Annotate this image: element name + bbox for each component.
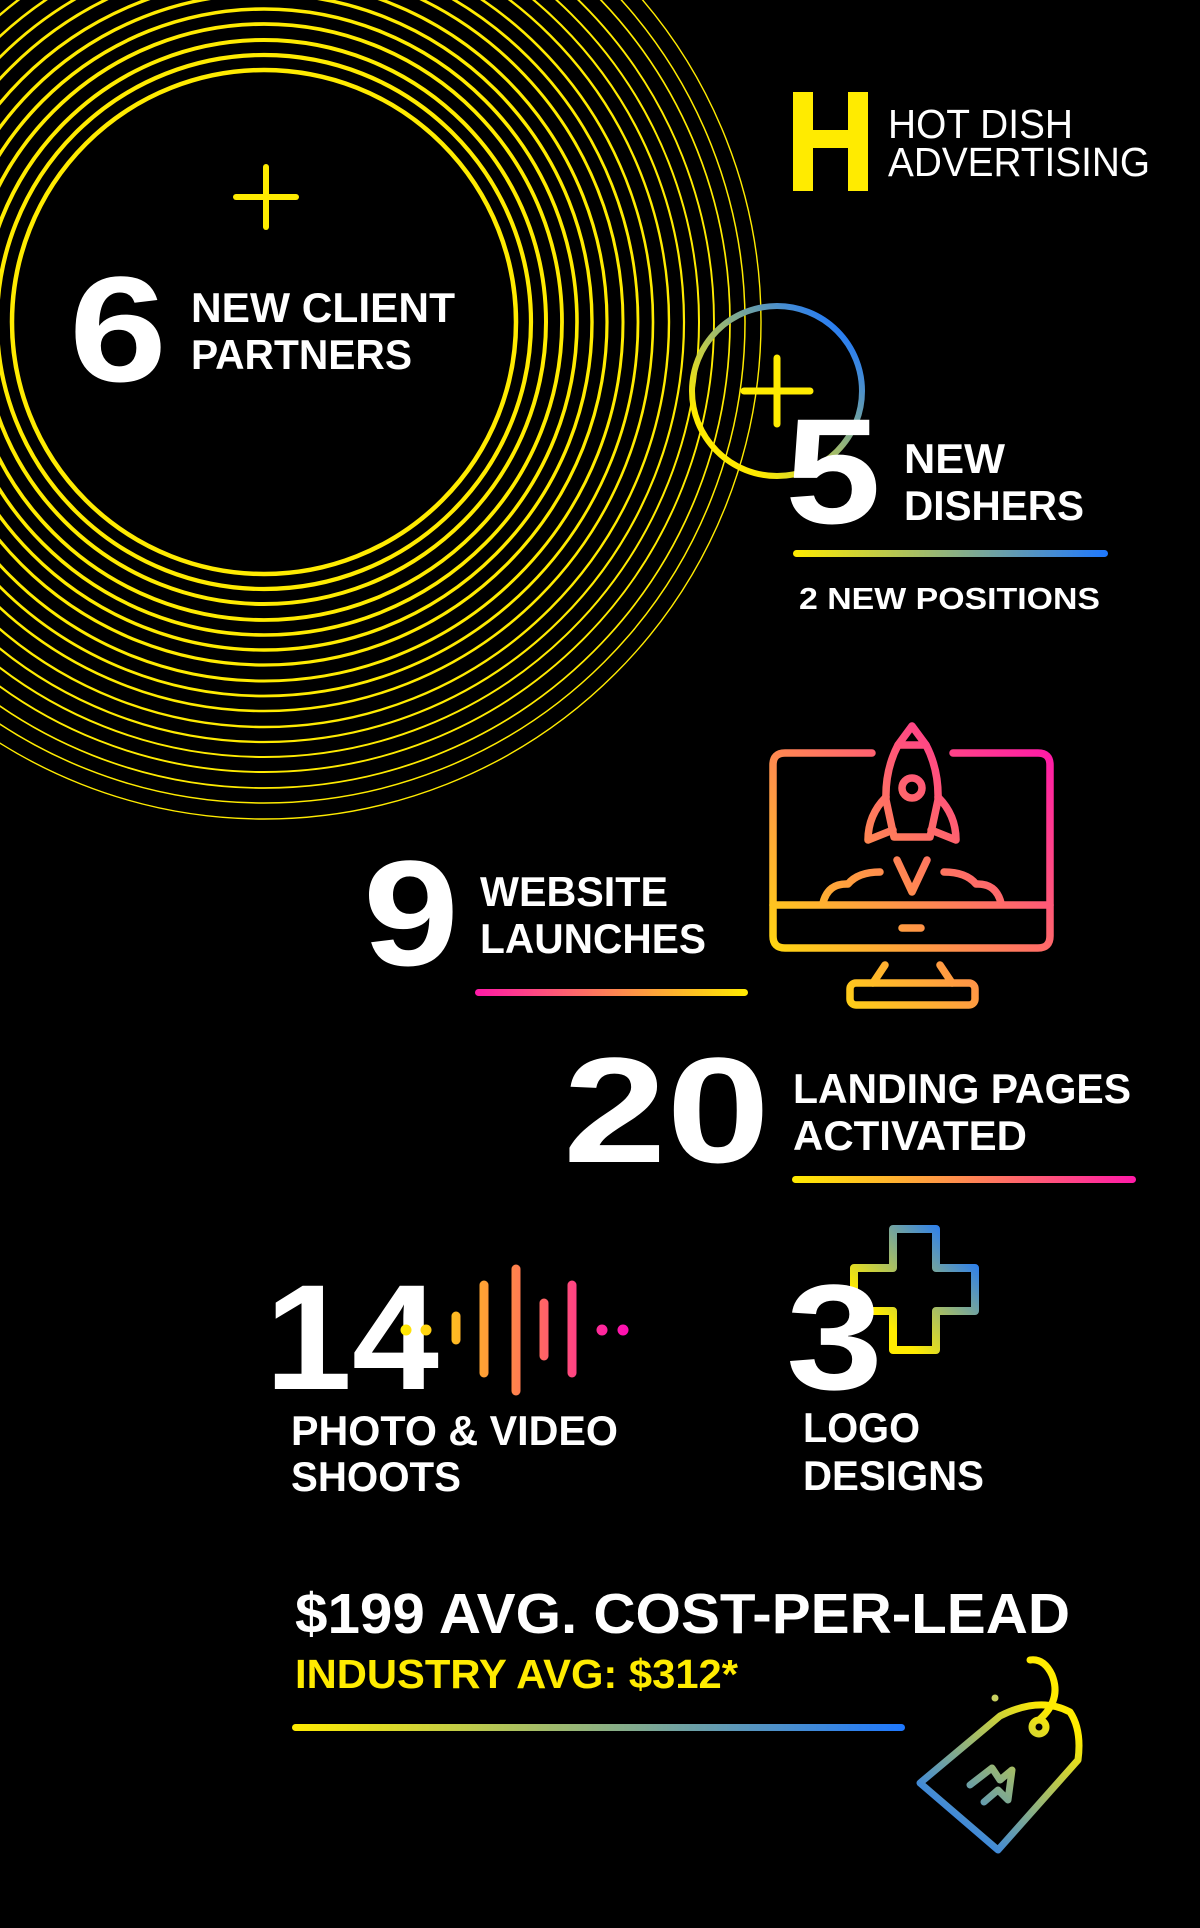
stat: 14 photo and video shoots: PHOTO & VIDEO	[291, 1407, 618, 1454]
logo: Hot Dish Advertising: HOT DISH	[888, 101, 1073, 147]
stat: 6 new client partners: PARTNERS	[191, 331, 412, 378]
icon: outlined plus	[854, 1229, 975, 1350]
stat: 20 landing pages activated: ACTIVATED	[793, 1112, 1027, 1159]
stat: 5 new dishers: 5	[785, 387, 881, 555]
logo: Hot Dish Advertising: ADVERTISING	[888, 139, 1150, 185]
stat: cost per lead: $199 AVG. COST-PER-LEAD	[295, 1582, 1070, 1646]
icon: monitor with rocket	[773, 726, 1050, 1005]
stat: 6 new client partners: NEW CLIENT	[191, 284, 455, 331]
stat: 5 new dishers	[785, 387, 1108, 616]
stat: cost per lead: INDUSTRY AVG: $312*	[295, 1651, 738, 1697]
stat: 20 landing pages activated: LANDING PAGES	[793, 1065, 1131, 1112]
stat: 3 logo designs: DESIGNS	[803, 1452, 984, 1499]
stat: 14 photo and video shoots	[265, 1253, 628, 1500]
stat: 5 new dishers: NEW	[904, 435, 1005, 482]
stat: 14 photo and video shoots: SHOOTS	[291, 1453, 461, 1500]
stat: 9 website launches: WEBSITE	[480, 868, 668, 915]
stat: cost per lead	[292, 1582, 1070, 1731]
stat: 5 new dishers: DISHERS	[904, 482, 1084, 529]
icon: sound wave	[400, 1269, 628, 1391]
stat: 9 website launches	[363, 829, 748, 997]
icon: plus in circle	[236, 167, 296, 227]
stat: 3 logo designs: LOGO	[803, 1404, 920, 1451]
icon: gradient circle with plus	[692, 306, 862, 476]
stat: 20 landing pages activated: 20	[563, 1026, 770, 1194]
logo: Hot Dish Advertising	[793, 92, 1150, 191]
stat: 6 new client partners: 6	[69, 245, 167, 413]
stat: 20 landing pages activated	[563, 1026, 1136, 1194]
stat: 9 website launches: LAUNCHES	[480, 915, 706, 962]
stat: 5 new dishers: 2 NEW POSITIONS	[799, 581, 1100, 616]
stat: 6 new client partners	[69, 245, 455, 413]
concentric rings	[0, 0, 761, 819]
stat: 9 website launches: 9	[363, 829, 459, 997]
stat: 3 logo designs: 3	[786, 1253, 883, 1421]
icon: price tag	[920, 1660, 1079, 1850]
stat: 14 photo and video shoots: 14	[265, 1253, 439, 1421]
stat: 3 logo designs	[786, 1253, 984, 1499]
